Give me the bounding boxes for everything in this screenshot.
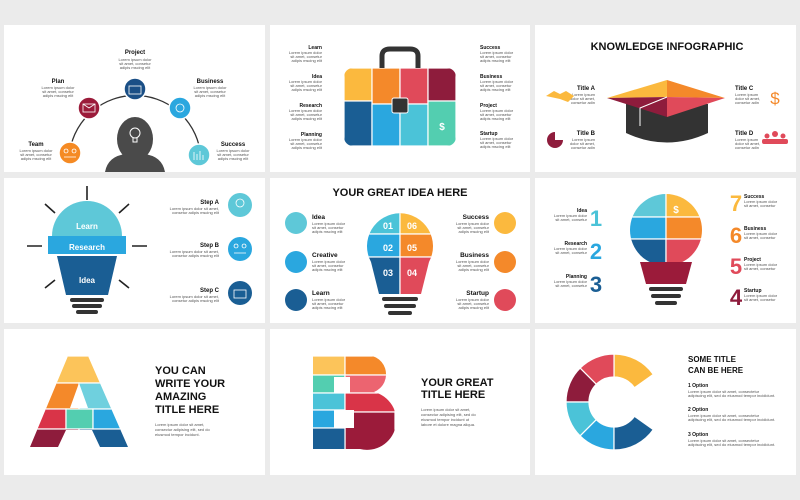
left numbers: 1 [590,206,602,231]
title: CAN BE HERE [688,366,744,375]
labels: adipis mscing elit [43,93,74,98]
panel: your great idea: sit amet, consetur [457,225,490,230]
left labels: sit amet, consetur [290,112,323,117]
right numbers: 7 [730,191,742,216]
numbered bulb [367,213,433,294]
labels: Lorem ipsum dolor [193,85,227,90]
options: 3 Option [688,432,708,438]
right labels: Lorem ipsum dolor [480,50,514,55]
labels: Success [221,142,246,148]
title: AMAZING [155,391,206,403]
text blocks: Lorem ipsum [572,137,596,142]
body text: Lorem ipsum dolor sit amet, [155,422,204,427]
text blocks: dolor sit amet, [570,96,595,101]
step labels: Lorem ipsum dolor sit amet, [170,249,219,254]
labels: sit amet, consetur [119,61,151,66]
right labels: Lorem ipsum dolor [480,108,514,113]
left labels: adipis mscing elit [292,87,323,92]
panel: numbered bulb: Idea [577,208,587,214]
panel: your great idea: adipis mscing elit [312,267,343,272]
panel: your great idea: Lorem ipsum dolor [312,259,346,264]
panel: numbered bulb: Planning [566,274,587,280]
left labels: adipis mscing elit [292,145,323,150]
body text: eiusmod tempor incidunt ut [421,417,470,422]
title [688,355,744,375]
panel: numbered bulb: Lorem ipsum dolor [554,213,588,218]
panel: knowledge infographic: dolor sit amet, [735,141,760,146]
panel: your great idea: sit amet, consetur [312,263,344,268]
panel: numbered bulb: Lorem ipsum dolor [744,199,778,204]
panel: letter C [535,329,796,475]
panel: numbered bulb: Lorem ipsum dolor [744,293,778,298]
body text: consectur adipising elit, sed do [155,427,210,432]
text blocks: dolor sit amet, [570,141,595,146]
panel: numbered bulb: sit amet, consetur [555,217,588,222]
left numbers [590,206,602,297]
right numbers [730,191,743,310]
left labels: Lorem ipsum dolor [289,79,323,84]
labels: Business [197,79,224,85]
body text: consectur adipising elit, sed do [421,412,476,417]
panel: bulb steps [4,178,265,323]
left labels: Lorem ipsum dolor [289,137,323,142]
labels: sit amet, consetur [42,89,74,94]
panel: your great idea: Startup [466,290,489,297]
right labels: sit amet, consetur [480,140,512,145]
icons [546,91,574,102]
step labels: consetur adipis mscing elit [172,253,220,258]
left labels: Lorem ipsum dolor [289,108,323,113]
panel: your great idea: sit amet, consetur [457,263,490,268]
right labels: Success [480,45,501,51]
panel: your great idea: Lorem ipsum dolor [456,259,490,264]
right labels: sit amet, consetur [480,112,512,117]
body text [421,407,476,427]
panel: letter A [4,329,265,475]
labels: Plan [52,79,65,85]
panel: your great idea: Idea [312,214,325,221]
panel: your great idea: 02 [383,243,393,253]
panel: knowledge infographic: Title C [735,86,754,92]
title: KNOWLEDGE INFOGRAPHIC [591,41,743,53]
panel: numbered bulb: sit amet, consetur [555,250,588,255]
options [688,383,775,447]
options: adipiscing elit, sed do eiusmod tempor incididunt. [688,442,775,447]
labels: Team [28,142,44,148]
panel: numbered bulb: Startup [744,288,762,294]
labels: Lorem ipsum dolor [216,148,250,153]
panel: your great idea: Lorem ipsum dolor [456,221,490,226]
panel: briefcase: $ [439,122,445,133]
options: 1 Option [688,383,708,389]
right numbers: 5 [730,254,742,279]
body text: eiusmod tempor incidunt. [155,432,200,437]
panel: numbered bulb: Lorem ipsum dolor [554,246,588,251]
panel: knowledge infographic: Lorem ipsum [735,137,759,142]
panel: knowledge infographic: consetur adin [735,100,759,105]
title: TITLE HERE [155,404,219,416]
right labels: adipis mscing elit [480,87,511,92]
title [155,365,225,416]
head silhouette [105,117,165,172]
panel: your great idea: Lorem ipsum dolor [456,297,490,302]
labels: adipis mscing elit [218,156,249,161]
labels: adipis mscing elit [120,65,151,70]
step labels: consetur adipis mscing elit [172,298,220,303]
panel: knowledge infographic: $ [770,89,780,108]
panel: numbered bulb: sit amet, consetur [555,283,588,288]
text blocks [570,86,596,150]
labels: Lorem ipsum dolor [118,57,152,62]
right labels: Project [480,103,497,109]
panel: your great idea: Business [460,252,489,259]
letter B mosaic [310,356,395,452]
right labels: adipis mscing elit [480,58,511,63]
labels: Project [125,50,145,56]
bulb: Learn [76,222,98,231]
title: WRITE YOUR [155,378,225,390]
panel: knowledge infographic [535,25,796,172]
left labels: sit amet, consetur [290,83,323,88]
panel: your great idea: 04 [407,268,417,278]
bulb tiles [630,194,702,262]
panel: numbered bulb: Project [744,257,761,263]
panel: letter B [270,329,530,475]
left labels: sit amet, consetur [290,141,323,146]
panel: numbered bulb: Lorem ipsum dolor [744,262,778,267]
panel: your great idea: Learn [312,290,330,297]
options: Lorem ipsum dolor sit amet, consectetur [688,389,760,394]
letter C ring [566,354,653,450]
options: Lorem ipsum dolor sit amet, consectetur [688,438,760,443]
right labels: Business [480,74,502,80]
bulb: Research [69,243,105,252]
right labels: Lorem ipsum dolor [480,136,514,141]
panel: your great idea: sit amet, consetur [312,225,344,230]
arc connector [70,95,200,150]
panel: numbered bulb: Lorem ipsum dolor [554,279,588,284]
text blocks: consetur adin [571,100,595,105]
left labels: adipis mscing elit [292,116,323,121]
left labels: Learn [308,45,322,51]
panel: your great idea: Success [463,214,489,221]
right labels: adipis mscing elit [480,116,511,121]
right labels: Lorem ipsum dolor [480,79,514,84]
title: YOU CAN [155,365,206,377]
panel: team arc [4,25,265,172]
panel: your great idea: 01 [383,221,393,231]
panel: your great idea: adipis mscing elit [312,229,343,234]
bulb [48,201,126,314]
left labels: Research [299,103,322,109]
right labels: sit amet, consetur [480,83,512,88]
body text: labore et dolore magna aliqua. [421,422,475,427]
labels: sit amet, consetur [217,152,249,157]
graduation cap [607,80,725,142]
labels [19,50,250,161]
step labels: Step B [200,243,220,249]
panel: knowledge infographic: consetur adin [735,145,759,150]
step labels: Lorem ipsum dolor sit amet, [170,294,219,299]
icon: lightbulb in head [130,128,140,142]
panel: your great idea: Creative [312,252,338,259]
body text [155,422,210,437]
left labels [289,45,323,150]
lock [392,98,408,113]
title: TITLE HERE [421,389,485,401]
left numbers: 2 [590,239,602,264]
panel: briefcase [270,25,530,172]
text blocks: Title B [577,131,596,137]
panel: your great idea: adipis mscing elit [459,305,490,310]
title: YOUR GREAT [421,377,494,389]
left labels: sit amet, consetur [290,54,323,59]
panel: numbered bulb: sit amet, consetur [744,203,776,208]
right numbers: 4 [730,285,743,310]
labels: adipis mscing elit [195,93,226,98]
step labels: Step A [200,200,220,206]
panel: numbered bulb: sit amet, consetur [744,297,776,302]
right labels [480,45,514,149]
step labels [170,200,220,303]
left labels: Idea [312,74,322,80]
options: adipiscing elit, sed do eiusmod tempor incididunt. [688,393,775,398]
panel: your great idea [270,178,530,323]
options: adipiscing elit, sed do eiusmod tempor incididunt. [688,417,775,422]
title: YOUR GREAT IDEA HERE [332,187,468,199]
panel: your great idea: sit amet, consetur [312,301,344,306]
panel: numbered bulb: Lorem ipsum dolor [744,231,778,236]
labels: sit amet, consetur [20,152,52,157]
right labels: Startup [480,131,498,137]
icon circles [59,78,210,166]
text blocks: consetur adin [571,145,595,150]
labels: adipis mscing elit [21,156,52,161]
bulb: Idea [79,276,96,285]
text blocks: Lorem ipsum [572,92,596,97]
labels: Lorem ipsum dolor [41,85,75,90]
step labels: Lorem ipsum dolor sit amet, [170,206,219,211]
panel: your great idea: Lorem ipsum dolor [312,221,346,226]
panel: numbered bulb: Success [744,194,765,200]
panel: your great idea: sit amet, consetur [457,301,490,306]
title [421,377,494,401]
left labels: adipis mscing elit [292,58,323,63]
left labels: Lorem ipsum dolor [289,50,323,55]
panel: numbered bulb: sit amet, consetur [744,266,776,271]
briefcase tiles [344,68,456,146]
right numbers: 6 [730,223,742,248]
panel: your great idea: adipis mscing elit [459,267,490,272]
step labels: Step C [200,288,220,294]
panel: your great idea: 05 [407,243,417,253]
right labels: adipis mscing elit [480,144,511,149]
title: SOME TITLE [688,355,737,364]
panel: numbered bulb: Research [564,241,587,247]
panel: knowledge infographic: dolor sit amet, [735,96,760,101]
rays [27,186,147,288]
labels: sit amet, consetur [194,89,226,94]
options: Lorem ipsum dolor sit amet, consectetur [688,413,760,418]
panel: your great idea: Lorem ipsum dolor [312,297,346,302]
panel: your great idea: 06 [407,221,417,231]
briefcase handle [382,49,418,68]
text blocks: Title A [577,86,596,92]
panel: your great idea: adipis mscing elit [312,305,343,310]
panel: numbered bulb: $ [673,205,679,216]
right items [494,212,516,234]
right labels: sit amet, consetur [480,54,512,59]
step icons [228,193,252,217]
body text: Lorem ipsum dolor sit amet, [421,407,470,412]
panel: numbered bulb [535,178,796,323]
options: 2 Option [688,407,708,413]
panel: your great idea: 03 [383,268,393,278]
panel: your great idea: adipis mscing elit [459,229,490,234]
letter A mosaic [30,356,128,447]
panel: numbered bulb: sit amet, consetur [744,235,776,240]
left labels: Planning [301,132,322,138]
left numbers: 3 [590,272,602,297]
panel: knowledge infographic: Lorem ipsum [735,92,759,97]
step labels: consetur adipis mscing elit [172,210,220,215]
panel: numbered bulb: Business [744,226,766,232]
left items [285,212,307,234]
panel: knowledge infographic: Title D [735,131,754,137]
labels: Lorem ipsum dolor [19,148,53,153]
